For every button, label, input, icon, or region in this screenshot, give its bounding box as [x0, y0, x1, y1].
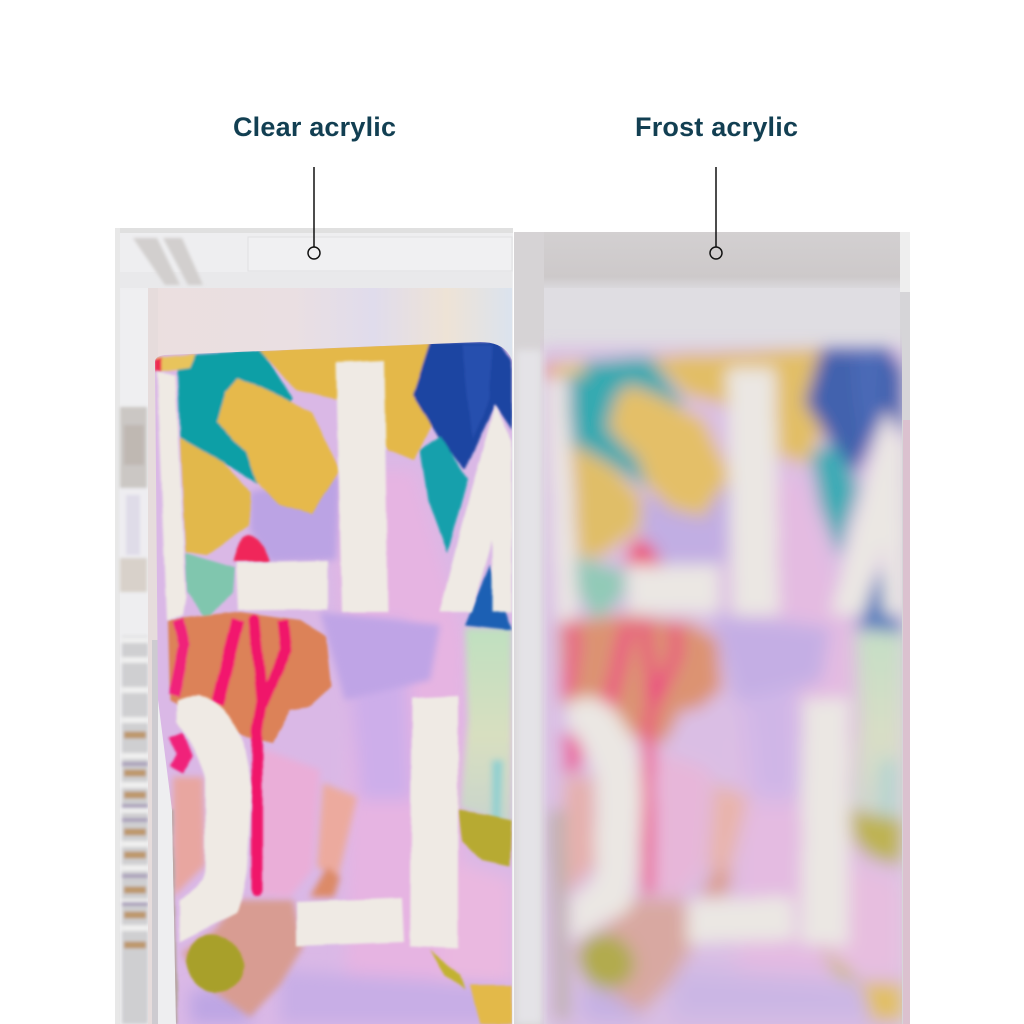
callout: frost acrylic leader line [710, 167, 722, 259]
diagonal reflections [133, 238, 203, 285]
inner canvas top band [148, 288, 512, 360]
callout: clear acrylic leader line [308, 167, 320, 259]
left edge reflections [120, 407, 148, 1024]
frost side strips [516, 350, 542, 1024]
heading: Clear acrylic: Clear acrylic [233, 112, 396, 142]
heading: Frost acrylic: Frost acrylic [635, 112, 798, 142]
blurred painting seen through frost [541, 347, 906, 1024]
panel: frost acrylic block [514, 232, 910, 1024]
painting seen through clear acrylic [150, 340, 515, 1024]
panel: clear acrylic block [115, 228, 515, 1024]
